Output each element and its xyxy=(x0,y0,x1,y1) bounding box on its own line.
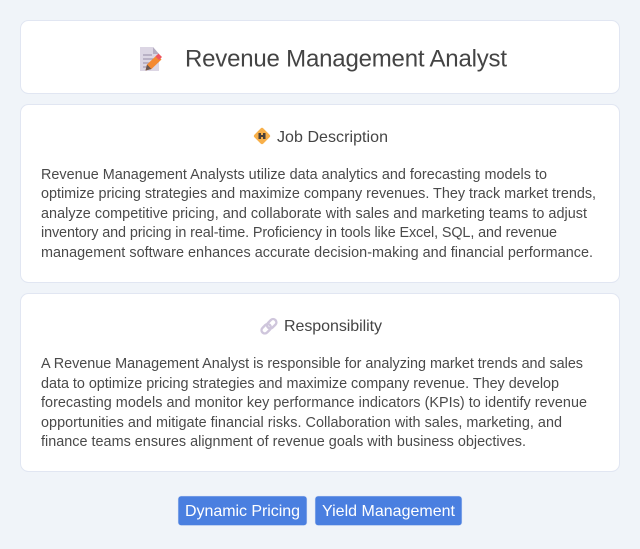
text block: responsibility: forecasting models and monitor key performance indicators (KPIs) to identify revenue xyxy=(41,395,587,411)
icon: chain link xyxy=(260,318,278,335)
heading: job description: Job Description xyxy=(277,129,388,146)
panel: responsibility xyxy=(20,294,620,472)
heading: responsibility: Responsibility xyxy=(284,318,382,335)
text block: job description: inventory and pricing in real-time. Proficiency in tools like Excel, SQL, and revenue xyxy=(41,225,557,241)
text block: responsibility: opportunities and mitigate financial risks. Collaboration with sales, marketing, and xyxy=(41,415,562,431)
icon: document with pencil xyxy=(140,47,162,71)
text block: responsibility: A Revenue Management Analyst is responsible for analyzing market trends and sales xyxy=(41,356,583,372)
panel: job description xyxy=(20,104,620,282)
tag: yield management: Yield Management xyxy=(322,503,456,520)
text block: responsibility: data to optimize pricing strategies and maximize company revenue. They develop xyxy=(41,376,559,392)
text block: job description xyxy=(41,167,596,261)
text block: job description: Revenue Management Analysts utilize data analytics and forecasting models to xyxy=(41,167,547,183)
tag: dynamic pricing xyxy=(178,496,307,526)
text block: job description: optimize pricing strategies and maximize company revenues. They track market trends, xyxy=(41,186,596,202)
text block: job description: management software enhances accurate decision-making and financial performance. xyxy=(41,245,593,261)
text block: responsibility: finance teams ensures alignment of revenue goals with business objectives. xyxy=(41,434,526,450)
icon: orange diamond xyxy=(253,127,271,145)
tag: dynamic pricing: Dynamic Pricing xyxy=(185,503,300,520)
title text: Revenue Management Analyst xyxy=(185,46,507,72)
text block: responsibility xyxy=(41,356,587,450)
text block: job description: analyze competitive pricing, and collaborate with sales and marketing teams to adjust xyxy=(41,206,587,222)
tag: yield management xyxy=(315,496,462,526)
panel: title xyxy=(20,20,620,94)
